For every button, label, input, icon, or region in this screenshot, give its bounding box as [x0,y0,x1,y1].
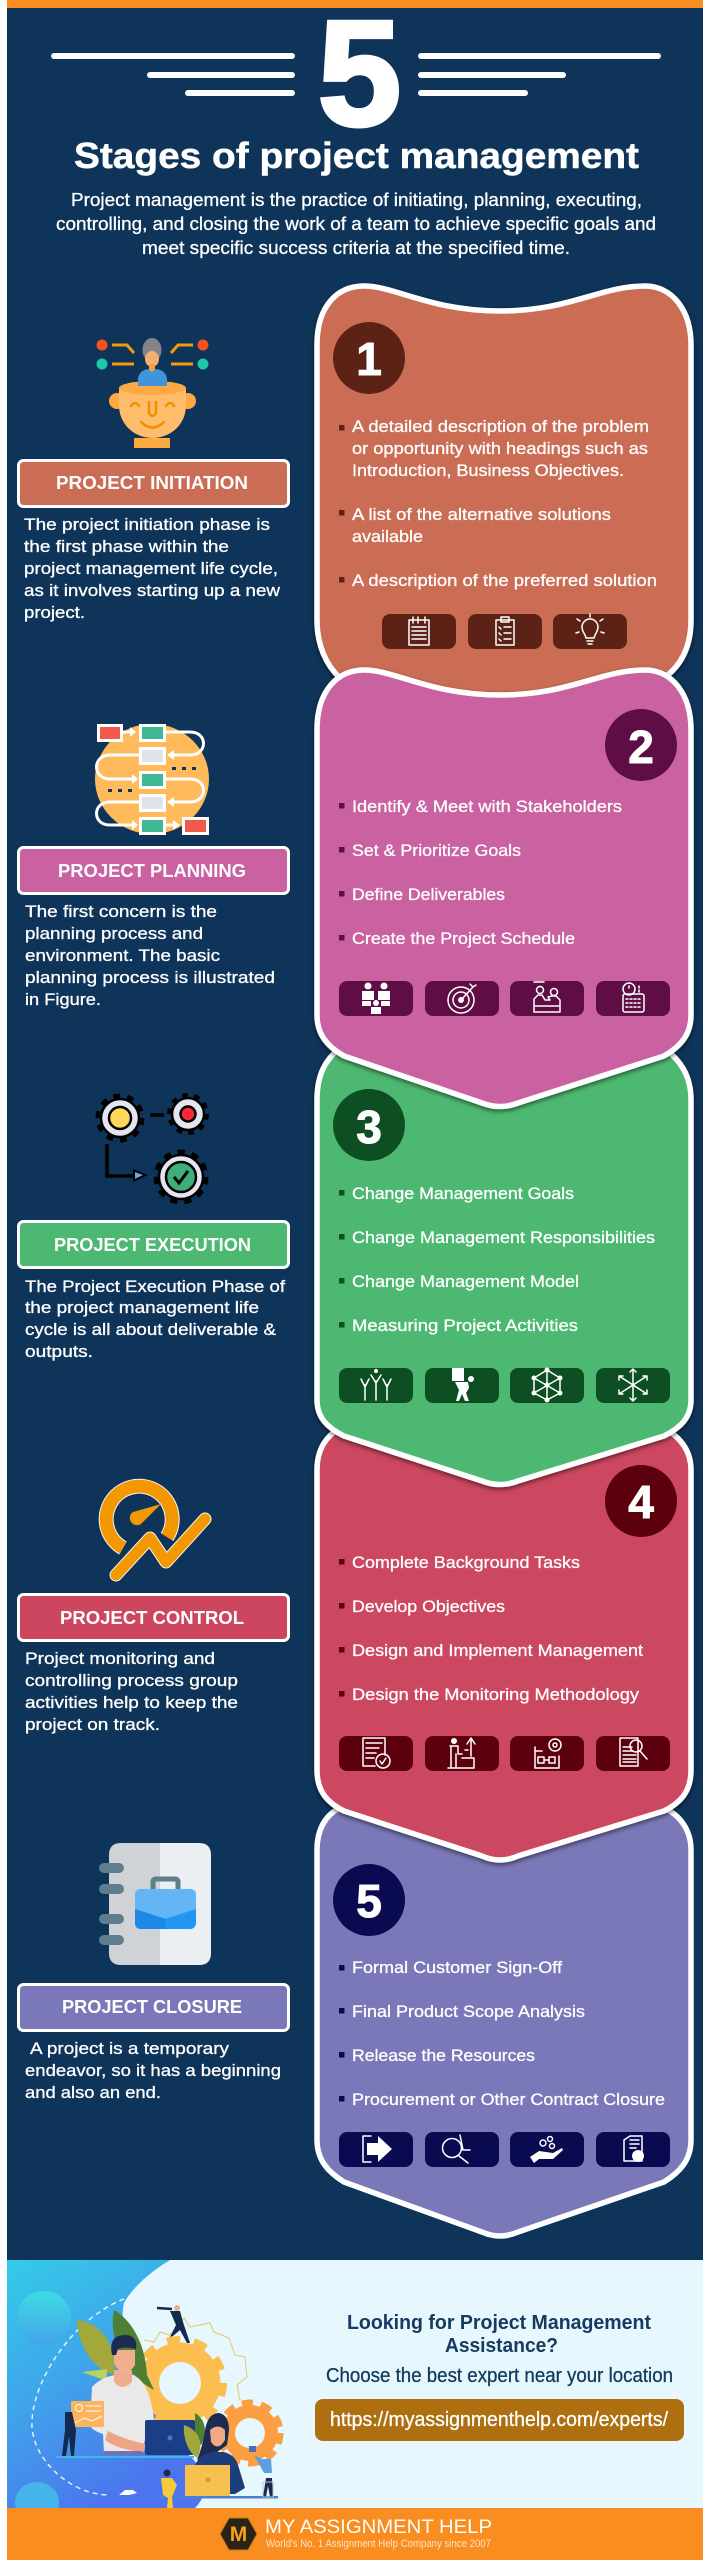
icon buttons [339,2132,670,2167]
bullet list: or opportunity with headings such as [352,439,648,458]
description text: outputs. [25,1342,93,1361]
description text: cycle is all about deliverable & [25,1320,277,1339]
heading [347,2312,651,2357]
badge 4: 4 [628,1476,654,1528]
icon: gears with connector [99,1096,206,1201]
bullet list: Set & Prioritize Goals [352,841,521,860]
badge 2: 2 [628,721,654,773]
card shape [317,1048,691,1484]
bullet list [339,797,622,948]
bullet list: Identify & Meet with Stakeholders [352,797,622,816]
description text: The project initiation phase is [24,515,270,534]
badge 2 [605,709,677,781]
icon buttons [382,614,627,649]
description text [25,902,275,1009]
bullet list: A detailed description of the problem [352,417,649,436]
background [7,2260,703,2508]
bullet list: Design the Monitoring Methodology [352,1685,640,1704]
description text [25,1277,285,1361]
bullet list [339,1184,655,1335]
bullet list: Complete Background Tasks [352,1553,580,1572]
bullet list [339,1553,643,1704]
bullet list: Define Deliverables [352,885,505,904]
description text: and also an end. [25,2083,161,2102]
bullet list: Release the Resources [352,2046,535,2065]
bullet list [339,1958,665,2109]
heading: Looking for Project Management [347,2312,651,2334]
icon: notebook with briefcase [99,1843,211,1965]
description text [25,2039,281,2102]
description text: endeavor, so it has a beginning [25,2061,281,2080]
label: project initiation: PROJECT INITIATION [56,473,248,493]
badge 5: 5 [356,1875,382,1927]
label: project planning [18,848,288,894]
description text: project on track. [25,1715,160,1734]
bullet list [339,417,657,590]
icon: head with person [96,338,208,448]
title: Stages of project management [74,135,639,176]
bullet list: A description of the preferred solution [352,571,657,590]
intro paragraph [56,190,656,258]
logo: M [230,2523,247,2546]
description text: the first phase within the [24,537,229,556]
bullet list: Final Product Scope Analysis [352,2002,585,2021]
bullet list: Change Management Goals [352,1184,574,1203]
label: project closure [18,1984,288,2030]
heading: Assistance? [445,2335,558,2357]
card shape [317,1808,691,2236]
description text: as it involves starting up a new [24,581,281,600]
bullet list: Create the Project Schedule [352,929,575,948]
description text: environment. The basic [25,946,221,965]
label: project initiation [18,460,288,506]
top orange bar [7,0,703,8]
badge 5 [333,1864,405,1936]
illustration: team with gears [32,2299,280,2508]
bullet list: Change Management Model [352,1272,579,1291]
blue blob [7,2260,205,2508]
icon: gauge and trend line [106,1486,205,1575]
label: project execution [18,1222,288,1268]
header [51,0,661,258]
stage 2 left column [18,724,288,1009]
panel: stage 1 card [317,286,691,705]
card shape [317,1428,691,1860]
decorative lines beside numeral [51,53,661,96]
icon buttons [339,1368,670,1403]
logo [220,2518,257,2550]
description text: Project monitoring and [25,1649,215,1668]
icon buttons [339,1736,670,1771]
description text [25,1649,238,1734]
description text: planning process is illustrated [25,968,275,987]
url button [315,2399,684,2441]
bullet list: Design and Implement Management [352,1641,643,1660]
description text: project management life cycle, [24,559,278,578]
panel: call to action [7,2260,703,2522]
label: project closure: PROJECT CLOSURE [62,1997,242,2017]
card shape [317,670,691,1106]
description text: the project management life [25,1298,259,1317]
label: project control [18,1594,288,1640]
bullet list: Change Management Responsibilities [352,1228,655,1247]
stage 3 left column [18,1096,288,1361]
panel: stage 2 card [317,670,691,1106]
description text: project. [24,603,85,622]
badge 1 [333,322,405,394]
panel: stage 4 card [317,1428,691,1860]
intro paragraph: meet specific success criteria at the specified time. [142,238,570,258]
bullet list: Procurement or Other Contract Closure [352,2090,665,2109]
bullet list: A list of the alternative solutions [352,505,611,524]
subheading: Choose the best expert near your location [326,2365,673,2387]
label: project execution: PROJECT EXECUTION [54,1235,251,1255]
badge 3 [333,1089,405,1161]
bullet list: Introduction, Business Objectives. [352,461,624,480]
bullet list: available [352,527,423,546]
icon: planning flow [95,724,209,834]
stage 1 left column [18,338,288,622]
badge 1: 1 [356,333,382,385]
bullet list: Formal Customer Sign-Off [352,1958,562,1977]
stage 4 left column [18,1486,288,1734]
label: project control: PROJECT CONTROL [60,1608,244,1628]
description text: A project is a temporary [30,2039,230,2058]
brand name: MY ASSIGNMENT HELP [265,2517,492,2538]
description text: controlling process group [25,1671,238,1690]
badge 3: 3 [356,1101,382,1153]
description text: planning process and [25,924,203,943]
description text: activities help to keep the [25,1693,238,1712]
icon buttons [339,981,670,1016]
panel: stage 3 card [317,1048,691,1484]
footer [7,2508,703,2560]
tagline: World's No. 1 Assignment Help Company since 2007 [266,2538,491,2550]
description text: The first concern is the [25,902,217,921]
footer bar [7,2508,703,2560]
description text: in Figure. [25,990,101,1009]
intro paragraph: Project management is the practice of initiating, planning, executing, [71,190,642,210]
intro paragraph: controlling, and closing the work of a team to achieve specific goals and [56,214,656,234]
card shape [317,286,691,705]
description text: The Project Execution Phase of [25,1277,285,1296]
badge 4 [605,1465,677,1537]
panel: stage 5 card [317,1808,691,2236]
stage 5 left column [18,1843,288,2102]
url button: https://myassignmenthelp.com/experts/ [330,2409,668,2431]
description text [24,515,281,622]
bullet list: Measuring Project Activities [352,1316,578,1335]
bullet list: Develop Objectives [352,1597,505,1616]
label: project planning: PROJECT PLANNING [58,861,246,881]
